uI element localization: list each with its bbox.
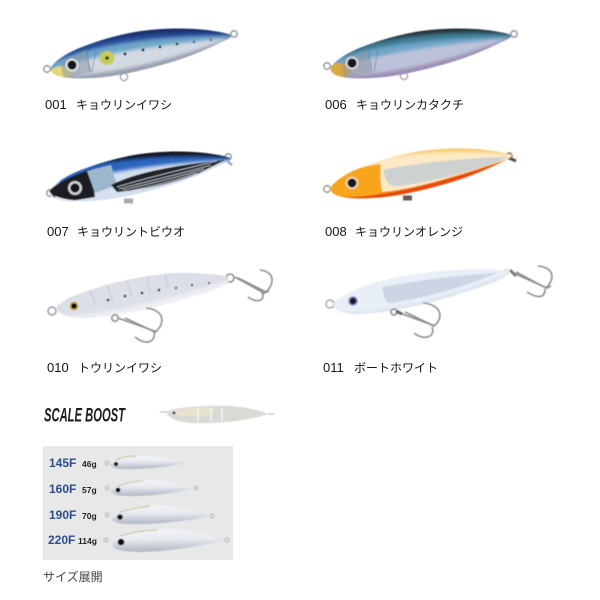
label 008: 008	[325, 224, 347, 239]
size row 145F: 145F	[49, 456, 76, 470]
rear treble hook	[511, 266, 552, 297]
size row 145F	[49, 456, 186, 470]
lure 001	[42, 28, 238, 82]
lure 008	[322, 148, 517, 202]
belly treble hook	[391, 303, 440, 337]
size row 160F	[49, 480, 198, 496]
label 008: キョウリンオレンジ	[355, 225, 463, 239]
lure 011	[326, 266, 552, 337]
scale boost lure	[160, 406, 274, 423]
label 007: キョウリントビウオ	[77, 225, 185, 239]
size row 160F: 160F	[49, 482, 76, 496]
lure 006	[322, 28, 518, 81]
caption: サイズ展開	[43, 569, 103, 584]
size row 160F: 57g	[82, 485, 97, 495]
lure 010	[48, 270, 272, 342]
lure 007	[46, 150, 233, 204]
label 007: 007	[47, 224, 69, 239]
size row 220F	[48, 529, 229, 552]
label 011: 011	[323, 360, 344, 375]
label 006: 006	[325, 97, 347, 112]
label 010: 010	[47, 360, 69, 375]
size chart photo	[43, 446, 233, 560]
label 006: キョウリンカタクチ	[356, 98, 464, 112]
size row 145F: 46g	[82, 459, 97, 469]
size row 220F: 114g	[78, 536, 97, 546]
size row 190F	[49, 505, 214, 524]
label 001: 001	[45, 97, 67, 112]
rear treble hook	[226, 270, 272, 301]
label 001: キョウリンイワシ	[76, 98, 172, 112]
size row 190F: 70g	[82, 511, 97, 521]
SCALE BOOST logo: SCALE BOOST	[44, 406, 126, 426]
label 010: トウリンイワシ	[78, 361, 162, 375]
belly treble hook	[112, 308, 162, 342]
size row 220F: 220F	[48, 533, 75, 547]
size row 190F: 190F	[49, 508, 76, 522]
label 011: ボートホワイト	[354, 361, 438, 375]
